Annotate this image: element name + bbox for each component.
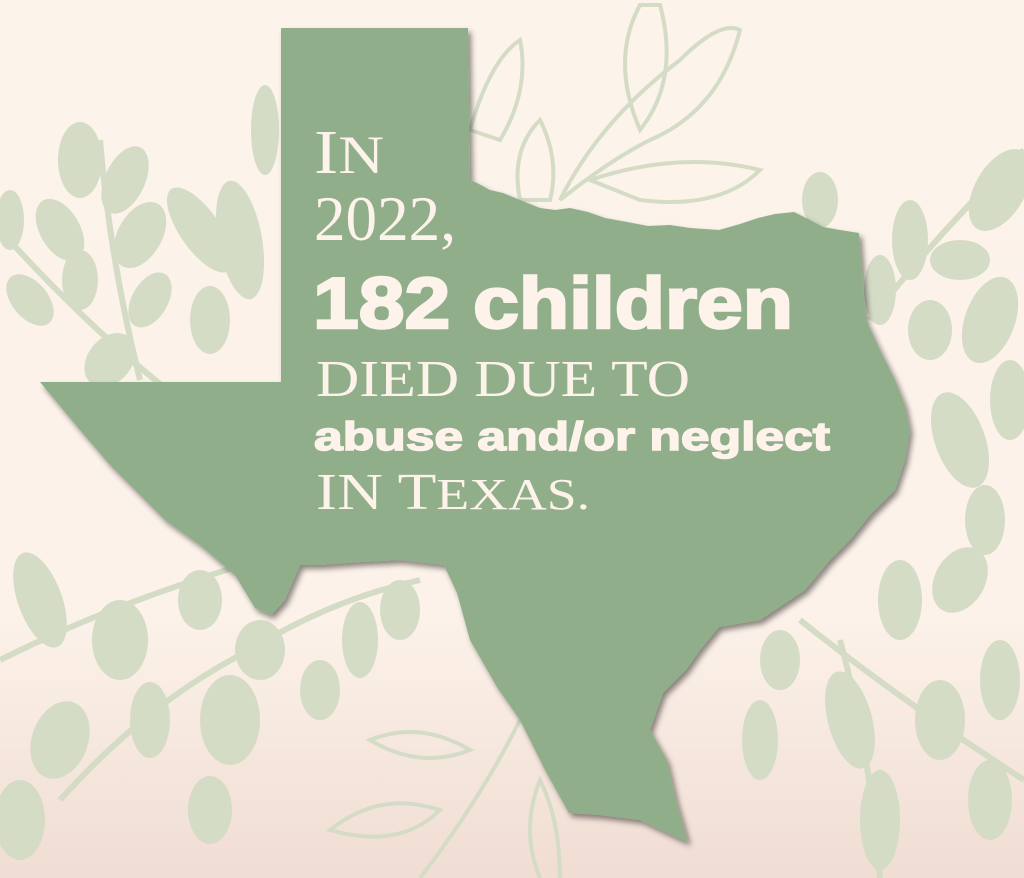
- line: 182 children: 182 children: [313, 264, 793, 344]
- leaf branch left upper: [0, 85, 279, 400]
- Texas shape: [40, 28, 910, 842]
- line: abuse and/or neglect: abuse and/or neglect: [314, 415, 830, 459]
- line: 2022,: 2022,: [314, 183, 456, 254]
- line: died due to: DIED DUE TO: [316, 351, 690, 408]
- line: In: IN: [314, 119, 384, 187]
- leaf branch right upper: [802, 139, 1024, 555]
- headline text: [313, 119, 830, 521]
- line: in Texas.: IN T EXAS.: [316, 464, 590, 521]
- outlined leaves: [330, 5, 760, 878]
- leaf branch right lower: [742, 537, 1024, 878]
- leaf branch left lower: [0, 545, 420, 860]
